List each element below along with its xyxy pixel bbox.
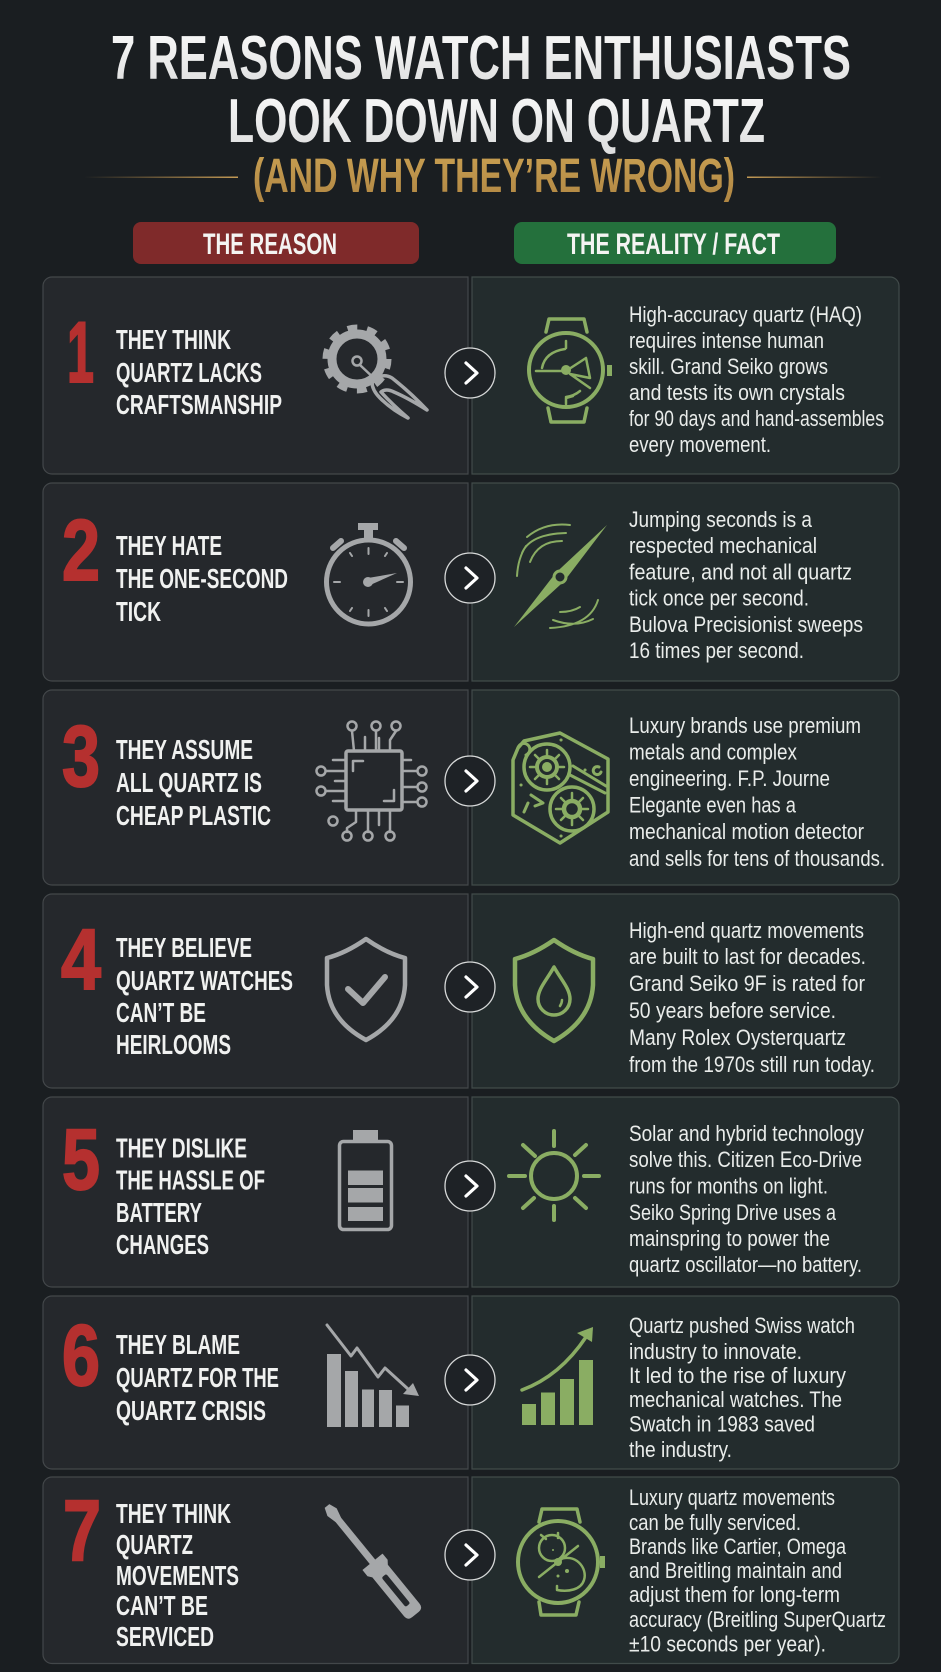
- column header: the reality: [514, 222, 836, 264]
- panel: reason 6: [43, 1296, 468, 1469]
- fact text 4: [629, 918, 875, 1077]
- reason text 2: THE ONE-SECOND: [116, 563, 288, 594]
- fact text 5: quartz oscillator—no battery.: [629, 1252, 862, 1277]
- reason text 1: CRAFTSMANSHIP: [116, 389, 282, 420]
- panel: reason 2: [43, 483, 468, 681]
- reason text 7: QUARTZ: [116, 1529, 193, 1560]
- reason text 4: [116, 932, 293, 1060]
- reason text 5: CHANGES: [116, 1229, 209, 1260]
- row 5: [43, 1097, 899, 1287]
- reason text 7: SERVICED: [116, 1621, 214, 1652]
- arrow 3: [445, 756, 495, 806]
- fact text 3: mechanical motion detector: [629, 819, 864, 844]
- fact text 3: engineering. F.P. Journe: [629, 766, 830, 791]
- fact text 3: metals and complex: [629, 740, 797, 764]
- reason text 7: THEY THINK: [116, 1498, 231, 1529]
- arrow 5: [445, 1161, 495, 1211]
- title: [111, 24, 851, 156]
- fact text 1: skill. Grand Seiko grows: [629, 354, 828, 379]
- fact text 6: mechanical watches. The: [629, 1387, 842, 1412]
- fact text 6: Swatch in 1983 saved: [629, 1412, 815, 1436]
- fact text 7: ±10 seconds per year).: [629, 1632, 826, 1656]
- arrow 2: [445, 553, 495, 603]
- icon: shield with drop: [515, 940, 593, 1041]
- reason text 2: TICK: [116, 596, 161, 627]
- icon: watch movement: [513, 733, 608, 843]
- arrow 4: [445, 962, 495, 1012]
- fact text 2: respected mechanical: [629, 533, 817, 558]
- fact text 6: Quartz pushed Swiss watch: [629, 1313, 855, 1338]
- fact text 4: Many Rolex Oysterquartz: [629, 1025, 846, 1050]
- column header: the reason: THE REASON: [203, 228, 337, 261]
- icon: chronograph watch: [518, 1509, 605, 1615]
- fact text 5: Solar and hybrid technology: [629, 1121, 864, 1146]
- number 6: 6: [62, 1308, 100, 1404]
- fact text 1: for 90 days and hand-assembles: [629, 406, 884, 431]
- fact text 7: and Breitling maintain and: [629, 1558, 842, 1583]
- panel: fact 6: [472, 1296, 899, 1469]
- icon: watch: [529, 319, 612, 422]
- fact text 2: [629, 507, 863, 663]
- panel: reason 3: [43, 690, 468, 885]
- column header: the reality: THE REALITY / FACT: [567, 228, 780, 261]
- reason text 3: CHEAP PLASTIC: [116, 800, 271, 831]
- fact text 4: Grand Seiko 9F is rated for: [629, 971, 865, 996]
- fact text 4: 50 years before service.: [629, 998, 836, 1023]
- icon: sun: [509, 1131, 599, 1220]
- fact text 2: Bulova Precisionist sweeps: [629, 612, 863, 637]
- icon: falling bar chart: [327, 1325, 419, 1427]
- reason text 7: [116, 1498, 239, 1652]
- fact text 2: 16 times per second.: [629, 638, 804, 663]
- icon: shield with check: [327, 939, 405, 1040]
- panel: reason 7: [43, 1477, 468, 1664]
- panel: fact 3: [472, 690, 899, 885]
- fact text 7: adjust them for long-term: [629, 1582, 840, 1607]
- fact text 1: requires intense human: [629, 328, 824, 353]
- column header: the reason: [133, 222, 419, 264]
- icon: gear and tweezers: [326, 328, 427, 418]
- fact text 2: Jumping seconds is a: [629, 507, 813, 532]
- fact text 6: It led to the rise of luxury: [629, 1363, 846, 1388]
- fact text 5: runs for months on light.: [629, 1174, 828, 1198]
- icon: rising bar chart: [522, 1327, 593, 1425]
- reason text 6: QUARTZ CRISIS: [116, 1395, 266, 1426]
- fact text 4: High-end quartz movements: [629, 918, 864, 943]
- reason text 2: [116, 530, 288, 627]
- reason text 4: THEY BELIEVE: [116, 932, 252, 963]
- reason text 5: THE HASSLE OF: [116, 1164, 265, 1196]
- arrow 7: [445, 1530, 495, 1580]
- arrow 1: [445, 348, 495, 398]
- fact text 5: Seiko Spring Drive uses a: [629, 1200, 837, 1225]
- reason text 7: CAN’T BE: [116, 1590, 208, 1621]
- reason text 2: THEY HATE: [116, 530, 222, 561]
- fact text 5: mainspring to power the: [629, 1226, 830, 1251]
- fact text 1: and tests its own crystals: [629, 380, 845, 405]
- icon: screwdriver: [317, 1498, 426, 1623]
- panel: reason 5: [43, 1097, 468, 1287]
- panel: reason 4: [43, 894, 468, 1088]
- arrow 6: [445, 1355, 495, 1405]
- fact text 3: Elegante even has a: [629, 792, 797, 818]
- subtitle: (AND WHY THEY’RE WRONG): [253, 150, 735, 203]
- reason text 7: MOVEMENTS: [116, 1560, 239, 1591]
- reason text 3: THEY ASSUME: [116, 734, 253, 765]
- reason text 5: THEY DISLIKE: [116, 1132, 247, 1164]
- fact text 7: [629, 1485, 886, 1656]
- reason text 1: [116, 324, 282, 420]
- number 2: 2: [62, 503, 100, 599]
- row 3: [43, 690, 899, 885]
- number 3: 3: [62, 709, 100, 805]
- fact text 1: every movement.: [629, 432, 771, 457]
- fact text 5: solve this. Citizen Eco-Drive: [629, 1147, 862, 1172]
- reason text 5: BATTERY: [116, 1197, 202, 1228]
- reason text 3: ALL QUARTZ IS: [116, 767, 262, 798]
- reason text 3: [116, 734, 271, 831]
- row 6: [43, 1296, 899, 1469]
- fact text 3: [629, 713, 885, 871]
- fact text 4: are built to last for decades.: [629, 944, 866, 969]
- fact text 3: Luxury brands use premium: [629, 713, 861, 738]
- fact text 2: feature, and not all quartz: [629, 560, 852, 584]
- reason text 5: [116, 1132, 265, 1260]
- panel: fact 2: [472, 483, 899, 681]
- row 7: [43, 1477, 899, 1664]
- fact text 3: and sells for tens of thousands.: [629, 846, 885, 871]
- icon: microchip: [316, 722, 426, 840]
- row 2: [43, 483, 899, 681]
- reason text 6: THEY BLAME: [116, 1329, 240, 1360]
- icon: sweeping hand: [514, 524, 607, 628]
- icon: battery: [340, 1130, 392, 1230]
- number 4: 4: [61, 912, 101, 1008]
- reason text 1: THEY THINK: [116, 324, 231, 355]
- fact text 7: Brands like Cartier, Omega: [629, 1534, 847, 1559]
- panel: fact 1: [472, 277, 899, 474]
- reason text 4: CAN’T BE: [116, 997, 206, 1028]
- fact text 6: [629, 1313, 855, 1462]
- number 5: 5: [62, 1112, 100, 1208]
- number 7: 7: [63, 1483, 101, 1579]
- fact text 7: accuracy (Breitling SuperQuartz: [629, 1607, 886, 1632]
- number 1: 1: [67, 305, 94, 401]
- reason text 6: [116, 1329, 279, 1426]
- row 1: [43, 277, 899, 474]
- fact text 7: can be fully serviced.: [629, 1510, 801, 1535]
- fact text 5: [629, 1121, 864, 1277]
- panel: fact 5: [472, 1097, 899, 1287]
- reason text 4: HEIRLOOMS: [116, 1029, 231, 1060]
- fact text 4: from the 1970s still run today.: [629, 1052, 875, 1077]
- reason text 1: QUARTZ LACKS: [116, 357, 262, 388]
- fact text 7: Luxury quartz movements: [629, 1485, 835, 1510]
- fact text 6: industry to innovate.: [629, 1339, 802, 1364]
- panel: fact 7: [472, 1477, 899, 1664]
- fact text 1: High-accuracy quartz (HAQ): [629, 302, 862, 327]
- reason text 6: QUARTZ FOR THE: [116, 1362, 279, 1393]
- reason text 4: QUARTZ WATCHES: [116, 965, 293, 996]
- icon: stopwatch: [326, 523, 410, 624]
- panel: reason 1: [43, 277, 468, 474]
- fact text 6: the industry.: [629, 1437, 732, 1462]
- fact text 1: [629, 302, 884, 457]
- panel: fact 4: [472, 894, 899, 1088]
- fact text 2: tick once per second.: [629, 586, 809, 610]
- row 4: [43, 894, 899, 1088]
